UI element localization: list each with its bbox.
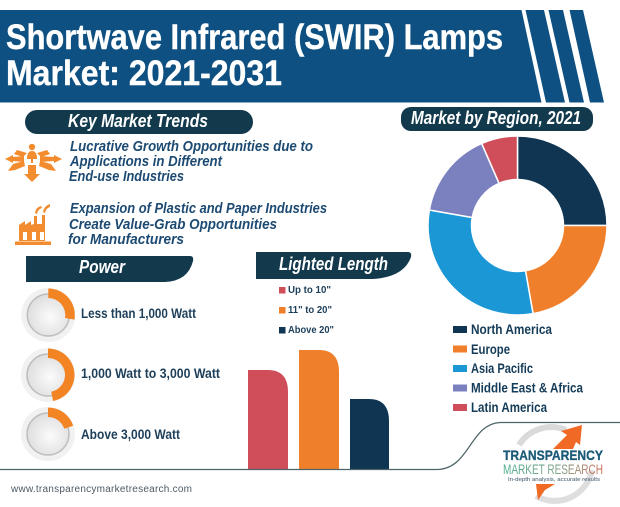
footer rule xyxy=(0,422,620,470)
legend: regions: Asia Pacific xyxy=(471,360,533,376)
heading: lighted length xyxy=(256,252,411,279)
legend: regions: Europe xyxy=(471,341,510,357)
title: Market: 2021-2031 xyxy=(6,54,282,93)
logo: transparency market research xyxy=(503,425,604,501)
heading: lighted length: Lighted Length xyxy=(279,254,388,274)
heading: key market trends xyxy=(25,110,253,134)
legend: regions: Latin America xyxy=(471,399,547,415)
website url: www.transparencymarketresearch.com xyxy=(10,484,192,495)
gauge: 1,000 to 3,000 watt xyxy=(21,348,75,402)
bar chart: lighted length xyxy=(248,350,389,469)
donut chart: market by region xyxy=(428,136,607,315)
legend: lighted length: 11" to 20" xyxy=(288,304,332,316)
label: less than 1,000 watt: Less than 1,000 Watt xyxy=(81,305,196,321)
text: trend two: Create Value-Grab Opportunities xyxy=(69,217,277,233)
legend: lighted length: Above 20" xyxy=(288,324,334,336)
text: trend two: for Manufacturers xyxy=(68,232,184,248)
icon: factory xyxy=(15,204,51,245)
gauge: less than 1,000 watt xyxy=(21,288,75,342)
title: Shortwave Infrared (SWIR) Lamps xyxy=(6,18,503,57)
legend: lighted length: Up to 10" xyxy=(288,284,331,296)
label: 1,000 to 3,000 watt: 1,000 Watt to 3,000 Watt xyxy=(81,365,220,381)
legend: regions: Middle East & Africa xyxy=(471,380,583,396)
text: trend one: End-use Industries xyxy=(69,169,184,185)
gauge: above 3,000 watt xyxy=(21,407,75,461)
heading: key market trends: Key Market Trends xyxy=(68,111,208,131)
legend: lighted length xyxy=(279,284,334,336)
logo: transparency market research: In-depth analysis, accurate results xyxy=(508,477,601,483)
text: trend one: Lucrative Growth Opportunities due to xyxy=(70,139,313,155)
icon: growth opportunities xyxy=(5,144,62,182)
heading: power xyxy=(26,256,193,282)
legend: regions xyxy=(453,321,583,415)
heading: power: Power xyxy=(79,257,126,277)
text: trend two: Expansion of Plastic and Paper Industries xyxy=(70,201,327,217)
heading: market by region: Market by Region, 2021 xyxy=(411,108,581,128)
logo: transparency market research: TRANSPARENCY xyxy=(503,447,604,463)
label: above 3,000 watt: Above 3,000 Watt xyxy=(81,426,180,442)
header banner xyxy=(0,10,604,102)
legend: regions: North America xyxy=(471,321,552,337)
text: trend one: Applications in Different xyxy=(69,154,223,170)
